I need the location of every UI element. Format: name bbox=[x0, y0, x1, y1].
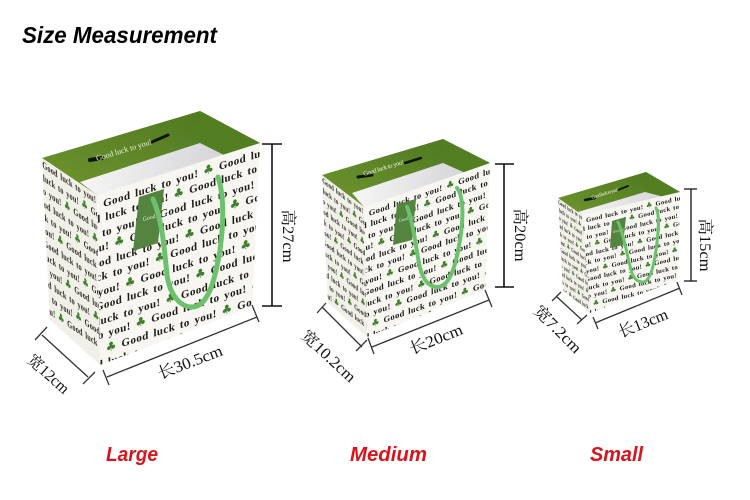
medium length label: 长20cm bbox=[407, 320, 466, 358]
small bag front pattern: Good luck to you! ♣ Good luck to you! ♣ Good luck to you! bbox=[550, 254, 746, 309]
medium length dimension bbox=[368, 290, 492, 354]
large bag front face bbox=[97, 143, 260, 365]
medium bag string and inner print bbox=[358, 158, 421, 178]
small height dimension bbox=[684, 189, 697, 281]
large bag front pattern: Good luck to you! ♣ Good luck to you! ♣ Good luck to you! bbox=[25, 204, 352, 323]
large bag front pattern: Good luck to you! ♣ Good luck to you! ♣ Good luck to you! bbox=[76, 260, 403, 379]
small bag front pattern: Good luck to you! ♣ Good luck to you! ♣ Good luck to you! bbox=[534, 207, 730, 262]
small bag side pattern: Good luck to you! ♣ Good luck to you! bbox=[550, 201, 610, 248]
large bag side pattern: Good luck to you! ♣ Good luck to you! bbox=[25, 160, 145, 252]
small bag side pattern: Good luck to you! ♣ Good luck to you! bbox=[541, 203, 601, 250]
large bag side pattern: Good luck to you! ♣ Good luck to you! bbox=[26, 238, 146, 330]
medium bag front pattern: Good luck to you! ♣ Good luck to you! ♣ Good luck to you! bbox=[308, 208, 561, 307]
medium bag interior bbox=[322, 139, 490, 207]
large bag string and inner print bbox=[90, 135, 168, 163]
medium bag front pattern: Good luck to you! ♣ Good luck to you! ♣ Good luck to you! bbox=[369, 120, 621, 219]
large width label: 宽12cm bbox=[24, 351, 73, 398]
large bag front pattern: Good luck to you! ♣ Good luck to you! ♣ Good luck to you! bbox=[6, 269, 333, 387]
small bag side pattern: Good luck to you! ♣ Good luck to you! bbox=[543, 251, 603, 298]
large height dimension bbox=[262, 144, 282, 306]
medium bag string and inner print: Good luck to you! bbox=[363, 159, 405, 178]
small bag side pattern bbox=[558, 200, 589, 309]
large bag side pattern: Good luck to you! ♣ Good luck to you! bbox=[43, 237, 163, 329]
large length label: 长30.5cm bbox=[155, 342, 226, 383]
large bag front pattern: Good luck to you! ♣ Good luck to you! ♣ Good luck to you! bbox=[103, 92, 430, 210]
large bag front pattern: Good luck to you! ♣ Good luck to you! ♣ Good luck to you! bbox=[14, 164, 341, 282]
small bag front pattern: Good luck to you! ♣ Good luck to you! ♣ Good luck to you! bbox=[551, 195, 748, 249]
large bag side pattern: Good luck to you! ♣ Good luck to you! bbox=[8, 239, 128, 331]
small bag tag: Good luck bbox=[612, 226, 628, 234]
medium bag front pattern: Good luck to you! ♣ Good luck to you! ♣ Good luck to you! bbox=[363, 200, 615, 299]
small width dimension bbox=[552, 292, 587, 324]
medium bag side pattern: Good luck to you! ♣ Good luck to you! bbox=[291, 263, 382, 342]
medium bag side pattern: Good luck to you! ♣ Good luck to you! bbox=[304, 263, 395, 342]
small bag front pattern: Good luck to you! ♣ Good luck to you! ♣ Good luck to you! bbox=[533, 267, 729, 322]
large bag front pattern: Good luck to you! ♣ Good luck to you! ♣ Good luck to you! bbox=[65, 221, 392, 339]
medium bag tag: Good luck bbox=[398, 213, 418, 223]
medium bag side pattern: Good luck to you! ♣ Good luck to you! bbox=[296, 175, 387, 254]
small bag front pattern: Good luck to you! ♣ Good luck to you! ♣ Good luck to you! bbox=[542, 231, 738, 286]
medium bag side pattern: Good luck to you! ♣ Good luck to you! bbox=[322, 175, 413, 254]
large bag front pattern: Good luck to you! ♣ Good luck to you! ♣ Good luck to you! bbox=[44, 140, 370, 258]
medium bag side pattern: Good luck to you! ♣ Good luck to you! bbox=[303, 201, 395, 281]
large bag interior bbox=[42, 111, 260, 195]
small length dimension bbox=[593, 282, 682, 329]
medium bag bbox=[322, 139, 490, 337]
medium bag tag bbox=[393, 199, 418, 245]
large bag front pattern bbox=[97, 152, 260, 365]
medium bag side pattern: Good luck to you! ♣ Good luck to you! bbox=[309, 236, 401, 316]
small bag string and inner print: Good luck to you! bbox=[591, 188, 620, 201]
medium bag handle bbox=[407, 188, 462, 287]
medium bag side pattern: Good luck to you! ♣ Good luck to you! bbox=[309, 175, 400, 254]
medium bag side pattern: Good luck to you! ♣ Good luck to you! bbox=[323, 236, 414, 316]
small name: Small bbox=[590, 444, 643, 466]
large width dimension bbox=[35, 327, 95, 384]
medium bag side pattern: Good luck to you! ♣ Good luck to you! bbox=[317, 263, 409, 342]
small bag front face bbox=[582, 192, 680, 313]
large bag side pattern: Good luck to you! ♣ Good luck to you! bbox=[18, 194, 138, 286]
small bag side pattern: Good luck to you! ♣ Good luck to you! bbox=[549, 270, 609, 317]
large bag front pattern: Good luck to you! ♣ Good luck to you! ♣ Good luck to you! bbox=[35, 244, 362, 362]
large bag tag: Good luck bbox=[142, 211, 168, 223]
small bag front pattern: Good luck to you! ♣ Good luck to you! ♣ Good luck to you! bbox=[559, 218, 750, 273]
medium bag side pattern bbox=[322, 178, 367, 328]
large bag front pattern: Good luck to you! ♣ Good luck to you! ♣ Good luck to you! bbox=[84, 156, 411, 274]
large bag bbox=[42, 111, 260, 365]
small length label: 长13cm bbox=[616, 305, 671, 341]
medium bag front pattern: Good luck to you! ♣ Good luck to you! ♣ Good luck to you! bbox=[300, 177, 553, 276]
medium bag front pattern: Good luck to you! ♣ Good luck to you! ♣ Good luck to you! bbox=[294, 258, 547, 357]
medium bag side pattern: Good luck to you! ♣ Good luck to you! bbox=[290, 201, 382, 281]
large bag side face bbox=[42, 158, 100, 365]
large bag tag bbox=[133, 189, 168, 251]
large bag side pattern: Good luck to you! ♣ Good luck to you! bbox=[42, 159, 162, 251]
large bag string and inner print: Good luck to you! bbox=[95, 137, 153, 163]
title: Size Measurement bbox=[22, 22, 218, 48]
large bag side pattern bbox=[42, 162, 100, 346]
small bag side pattern: Good luck to you! ♣ Good luck to you! bbox=[558, 199, 618, 246]
large bag side pattern: Good luck to you! ♣ Good luck to you! bbox=[19, 272, 139, 364]
small bag interior bbox=[558, 172, 680, 215]
large bag side pattern: Good luck to you! ♣ Good luck to you! bbox=[35, 193, 155, 285]
medium bag front pattern: Good luck to you! ♣ Good luck to you! ♣ Good luck to you! bbox=[323, 159, 576, 257]
large length dimension bbox=[103, 305, 259, 385]
medium bag inner wall bbox=[443, 139, 490, 175]
medium bag side face bbox=[322, 175, 367, 337]
medium name: Medium bbox=[350, 444, 427, 466]
small bag tag bbox=[610, 217, 628, 248]
large bag side pattern: Good luck to you! ♣ Good luck to you! bbox=[36, 271, 156, 363]
medium height label: 高20cm bbox=[511, 208, 530, 262]
medium bag front pattern: Good luck to you! ♣ Good luck to you! ♣ Good luck to you! bbox=[346, 139, 598, 238]
small width label: 宽7.2cm bbox=[530, 302, 586, 357]
small bag side pattern: Good luck to you! ♣ Good luck to you! bbox=[540, 272, 601, 319]
medium width label: 宽10.2cm bbox=[297, 327, 360, 387]
small bag bbox=[558, 172, 680, 313]
small bag inner wall bbox=[645, 172, 680, 197]
medium bag front pattern bbox=[364, 170, 490, 337]
small bag handle bbox=[618, 208, 658, 282]
small bag string and inner print bbox=[585, 186, 628, 201]
large bag side pattern: Good luck to you! ♣ Good luck to you! bbox=[7, 161, 127, 253]
medium height dimension bbox=[495, 164, 514, 287]
medium bag front pattern: Good luck to you! ♣ Good luck to you! ♣ Good luck to you! bbox=[317, 239, 570, 337]
medium bag inner white bbox=[352, 163, 470, 207]
small bag side pattern: Good luck to you! ♣ Good luck to you! bbox=[547, 222, 607, 270]
small bag front pattern bbox=[583, 196, 680, 313]
small bag side pattern: Good luck to you! ♣ Good luck to you! bbox=[538, 225, 599, 272]
small bag side pattern: Good luck to you! ♣ Good luck to you! bbox=[551, 249, 612, 296]
medium bag front pattern: Good luck to you! ♣ Good luck to you! ♣ Good luck to you! bbox=[340, 220, 593, 319]
medium bag front pattern: Good luck to you! ♣ Good luck to you! ♣ Good luck to you! bbox=[348, 250, 601, 349]
large bag handle bbox=[153, 177, 223, 307]
large bag front pattern: Good luck to you! ♣ Good luck to you! ♣ Good luck to you! bbox=[73, 115, 400, 234]
small bag side pattern: Good luck to you! ♣ Good luck to you! bbox=[557, 268, 617, 315]
medium width dimension bbox=[317, 303, 367, 351]
small bag side face bbox=[558, 198, 590, 313]
small bag inner white bbox=[578, 192, 664, 215]
large bag side pattern: Good luck to you! ♣ Good luck to you! bbox=[1, 273, 121, 365]
large bag inner wall bbox=[200, 111, 260, 157]
small bag side pattern: Good luck to you! ♣ Good luck to you! bbox=[555, 220, 616, 267]
medium bag side pattern: Good luck to you! ♣ Good luck to you! bbox=[296, 236, 388, 316]
medium bag front pattern: Good luck to you! ♣ Good luck to you! ♣ Good luck to you! bbox=[331, 189, 584, 288]
large name: Large bbox=[106, 444, 158, 466]
large height label: 高27cm bbox=[279, 210, 298, 263]
large bag side pattern: Good luck to you! ♣ Good luck to you! bbox=[0, 195, 120, 287]
medium bag front pattern: Good luck to you! ♣ Good luck to you! ♣ Good luck to you! bbox=[354, 170, 607, 269]
medium bag side pattern: Good luck to you! ♣ Good luck to you! bbox=[317, 201, 408, 280]
large bag front pattern: Good luck to you! ♣ Good luck to you! ♣ Good luck to you! bbox=[54, 180, 381, 298]
medium bag front face bbox=[364, 163, 490, 337]
small height label: 高15cm bbox=[696, 218, 715, 272]
large bag front pattern: Good luck to you! ♣ Good luck to you! ♣ Good luck to you! bbox=[95, 196, 422, 314]
large bag inner white bbox=[80, 143, 228, 195]
small bag side pattern: Good luck to you! ♣ Good luck to you! bbox=[560, 247, 620, 294]
